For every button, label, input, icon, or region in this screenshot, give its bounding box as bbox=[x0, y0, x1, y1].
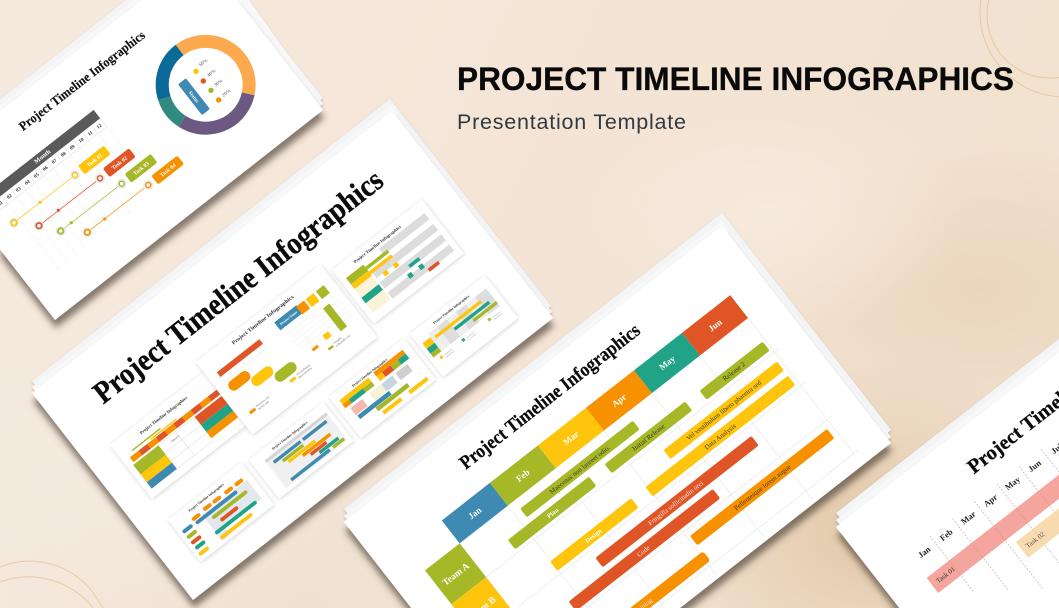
back sheets bbox=[0, 0, 323, 314]
grid bbox=[460, 314, 865, 608]
bar: Vel vestibulum bbox=[663, 361, 784, 459]
task tag: Task 04 bbox=[151, 156, 184, 184]
month table header: 11 bbox=[87, 130, 95, 137]
back sheets bbox=[32, 99, 552, 594]
bar: Data Analysis: Data Analysis bbox=[703, 423, 738, 452]
team column bbox=[425, 543, 510, 608]
bar: Release 2: Release 2 bbox=[722, 361, 747, 383]
bar: Code: Code bbox=[636, 545, 652, 559]
donut legend: 30% bbox=[214, 79, 224, 89]
donut legend: 40% bbox=[207, 69, 217, 79]
month header: Apr bbox=[610, 392, 628, 409]
donut legend: 60% bbox=[199, 58, 209, 68]
month header: Jun bbox=[706, 317, 724, 334]
bar: Plan bbox=[508, 477, 596, 549]
bar: Plan: Plan bbox=[546, 507, 561, 520]
timeline line: Task 04 bbox=[82, 180, 153, 237]
thumbnail: project name slide: Maecenas non bbox=[255, 395, 270, 408]
thumbnail: pills slide bbox=[168, 463, 274, 562]
month labels: Jan bbox=[916, 544, 933, 560]
bar: Release 2 bbox=[700, 342, 770, 400]
month table header: 08 bbox=[60, 151, 68, 159]
month table header: 06 bbox=[42, 165, 50, 173]
task tag: Task 02 bbox=[103, 148, 136, 177]
bar: Initial Release bbox=[605, 401, 692, 473]
thumbnail: project name slide: Vel vestibulum bbox=[296, 363, 311, 377]
front sheet bbox=[0, 0, 323, 320]
month table header: 04 bbox=[24, 179, 32, 187]
thumbnail: objectives slide: Project Timeline Infographics bbox=[351, 357, 389, 388]
thumbnail: pills slide: Project Timeline Infographics bbox=[188, 482, 225, 513]
month labels bbox=[916, 441, 1059, 560]
front sheet bbox=[836, 353, 1059, 608]
month table header: 12 bbox=[96, 123, 104, 131]
bar: Pellentesque: Pellentesque lorem augue bbox=[733, 464, 792, 512]
bar: Task 01 bbox=[927, 461, 1059, 593]
month table header: 10 bbox=[78, 137, 86, 145]
bar: Pellentesque bbox=[690, 429, 834, 545]
month table header: 05 bbox=[33, 172, 41, 180]
timeline line: Task 01 bbox=[9, 170, 80, 228]
subheading: Presentation Template bbox=[457, 110, 686, 134]
heading: PROJECT TIMELINE INFOGRAPHICS bbox=[457, 61, 1014, 97]
thumbnail: table slide: Objective bbox=[170, 434, 181, 443]
month header: Feb bbox=[514, 467, 532, 484]
bar: Task 02: Task 02 bbox=[1024, 530, 1047, 550]
thumbnail: project name slide: laoreet odio bbox=[258, 400, 270, 411]
thumbnail: project name slide bbox=[196, 265, 377, 434]
donut chart bbox=[162, 41, 249, 128]
month table header: 02 bbox=[6, 193, 14, 201]
bar: Vel vestibulum: Vel vestibulum libero pharetra sed bbox=[685, 379, 764, 442]
decorative circles bottom left bbox=[0, 561, 103, 608]
slide title: Project Timeline Infographics bbox=[16, 27, 148, 134]
month labels: Apr bbox=[981, 492, 999, 509]
bar: Data Analysis bbox=[645, 376, 795, 497]
slide title: Project Timeline Infographics bbox=[456, 320, 645, 474]
right slide contents bbox=[884, 300, 1059, 608]
month table header: 07 bbox=[51, 158, 59, 166]
month labels: Mar bbox=[959, 509, 978, 526]
thumbnail: phases slide: Project Timeline Infographics bbox=[352, 224, 402, 264]
task tag: Task 03: Task 03 bbox=[133, 161, 151, 177]
task tag: Task 04: Task 04 bbox=[159, 163, 178, 179]
thumbnail: header gantt slide bbox=[410, 276, 518, 377]
bar: Task 01: Task 01 bbox=[935, 565, 957, 585]
month header bbox=[442, 295, 748, 543]
task tag: Task 01 bbox=[78, 146, 111, 174]
front sheet bbox=[32, 111, 553, 600]
thumbnail: project name slide: Project Name bbox=[279, 310, 298, 326]
task tag: Task 01: Task 01 bbox=[86, 153, 104, 169]
bar: Design bbox=[550, 498, 639, 571]
thumbnail: project name slide: Project Timeline Infographics bbox=[231, 294, 295, 346]
panel: gantt slide with months and teams bbox=[344, 213, 891, 608]
bar: Maecenas bbox=[520, 421, 640, 517]
month table header: Month bbox=[33, 148, 52, 166]
donut legend: 20% bbox=[222, 89, 232, 99]
front sheet bbox=[344, 226, 891, 608]
donut centre label bbox=[178, 78, 210, 115]
thumbnail: table slide: Project Timeline Infographics bbox=[139, 395, 188, 435]
bar: Task 02 bbox=[1016, 474, 1059, 558]
timeline line: Task 03 bbox=[56, 179, 127, 236]
month header: Jan bbox=[466, 505, 483, 521]
timeline line: Task 02 bbox=[34, 173, 105, 231]
month labels: May bbox=[1003, 474, 1023, 492]
bar: Maecenas: Maecenas non laoreet odio. bbox=[549, 444, 612, 496]
task tag: Task 03 bbox=[125, 154, 157, 183]
month labels: Feb bbox=[938, 527, 955, 543]
thumbnail: objectives slide bbox=[329, 339, 436, 438]
thumbnail: project name slide: sollicitudin orci bbox=[335, 334, 351, 348]
dashed month lines bbox=[930, 432, 1059, 608]
team column: Team A bbox=[441, 561, 472, 588]
overview title: Project Timeline Infographics bbox=[86, 162, 390, 410]
month header: Mar bbox=[561, 429, 581, 447]
thumbnail: header gantt slide: Project Timeline Infographics bbox=[432, 294, 471, 325]
back sheets bbox=[836, 339, 1059, 608]
bar: Fringilla: Fringilla sollicitudin orci bbox=[647, 480, 705, 527]
donut centre label: Status bbox=[187, 91, 199, 104]
task tag: Task 02: Task 02 bbox=[111, 155, 129, 171]
month header: May bbox=[657, 353, 677, 372]
back sheets bbox=[344, 213, 891, 608]
thumbnail: table slide bbox=[110, 371, 246, 499]
thumbnail: project name slide: libero pharetra bbox=[298, 366, 313, 379]
bar: Code bbox=[569, 489, 720, 608]
month table header bbox=[0, 110, 158, 288]
thumbnail: shaded gantt slide: Project Timeline Infographics bbox=[271, 420, 309, 451]
bar: Initial Release: Initial Release bbox=[631, 423, 666, 453]
month table header: 09 bbox=[69, 144, 77, 152]
thumbnail: shaded gantt slide bbox=[249, 402, 353, 499]
panel: slide top left with donut chart bbox=[0, 0, 323, 320]
decorative circles top right bbox=[980, 0, 1059, 97]
bar: Training bbox=[629, 551, 710, 608]
thumbnail: phases slide bbox=[332, 200, 464, 324]
thumbnail: project name slide: Fringilla bbox=[333, 336, 343, 345]
panel: overview slide with thumbnails bbox=[32, 99, 553, 600]
donut legend bbox=[193, 58, 232, 103]
month labels: Jun bbox=[1026, 458, 1043, 474]
bar: Design: Design bbox=[584, 528, 604, 545]
gantt contents bbox=[382, 259, 865, 608]
month table header: 03 bbox=[15, 186, 23, 194]
bar: Fringilla bbox=[595, 436, 759, 567]
panel: right partial slide bbox=[836, 300, 1059, 608]
